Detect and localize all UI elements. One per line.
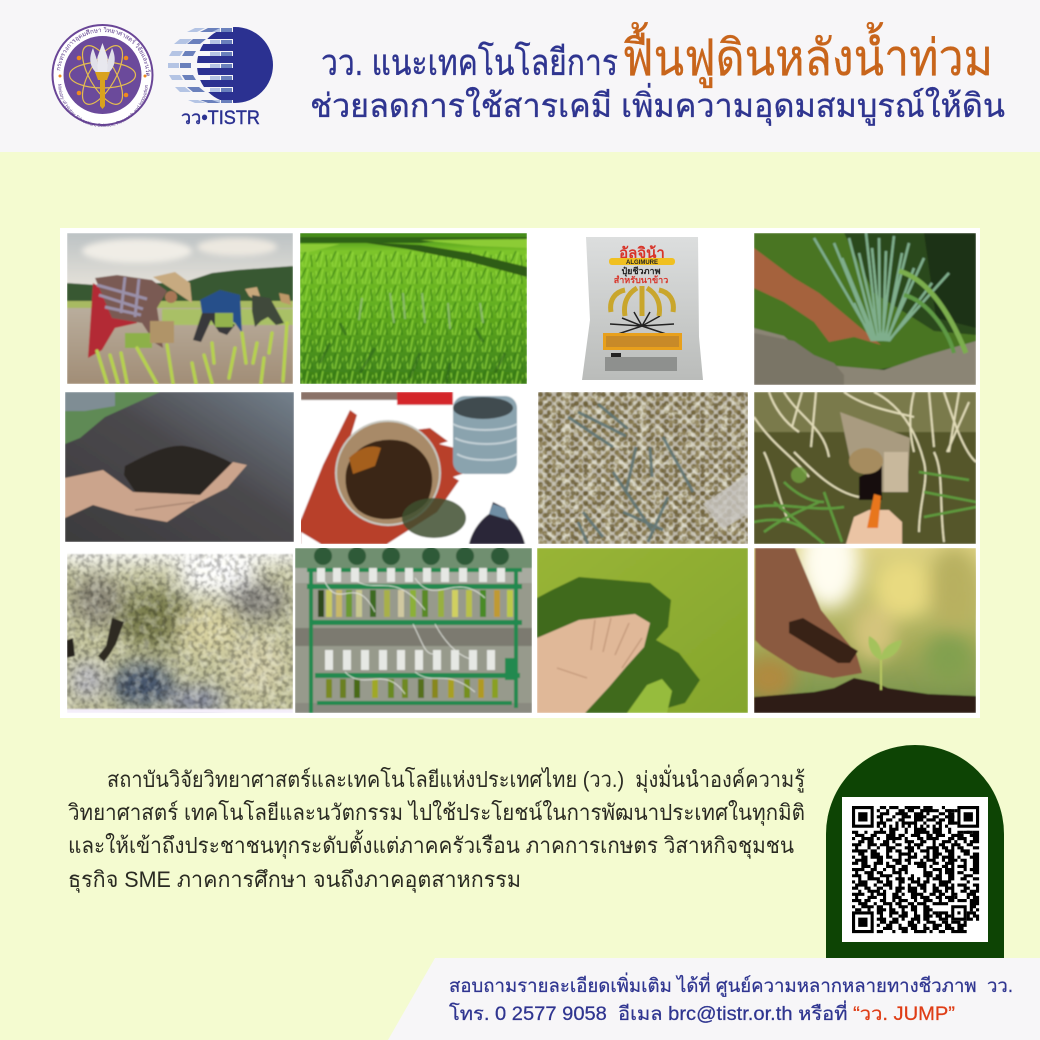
logo: TISTR: [168, 27, 273, 129]
title line 1: [321, 22, 993, 88]
photo: petri dish with soil held in hand: [301, 392, 526, 544]
body paragraph: ธุรกิจ SME ภาคการศึกษา จนถึงภาคอุตสาหกรรม: [68, 867, 521, 893]
QR code card: [826, 745, 1004, 958]
body paragraph: วิทยาศาสตร์ เทคโนโลยีและนวัตกรรม ไปใช้ประโยชน์ในการพัฒนาประเทศในทุกมิติ: [67, 800, 805, 826]
body paragraph: และให้เข้าถึงประชาชนทุกระดับตั้งแต่ภาคครัวเรือน ภาคการเกษตร วิสาหกิจชุมชน: [68, 830, 794, 859]
photo: Algimure fertilizer bag: สำหรับนาข้าว: [614, 275, 668, 285]
logo: ministry seal: [52, 24, 154, 127]
photo: hand holding compost soil: [65, 392, 294, 542]
title line 1: ฟื้นฟูดินหลังน้ำท่วม: [622, 22, 993, 88]
body paragraph: [67, 764, 805, 893]
photo: Algimure fertilizer bag: ALGIMURE: [626, 260, 658, 266]
photo: mottled soil close-up: [67, 553, 293, 713]
photo: hand in green algae water: [537, 548, 748, 713]
photo: Algimure fertilizer bag: ปุ๋ยชีวภาพ: [621, 266, 661, 277]
photo: green rice field: [300, 233, 527, 384]
photo: Algimure fertilizer bag: [533, 228, 752, 388]
body paragraph: สถาบันวิจัยวิทยาศาสตร์และเทคโนโลยีแห่งประเทศไทย (วว.) มุ่งมั่นนำองค์ความรู้: [107, 764, 805, 793]
title line 1: วว. แนะเทคโนโลยีการ: [321, 41, 618, 83]
title line 2: ช่วยลดการใช้สารเคมี เพิ่มความอุดมสมบูรณ์ให้ดิน: [310, 83, 1005, 126]
photo collage panel: [57, 228, 980, 718]
photo: Algimure fertilizer bag: อัลจิน้า: [619, 244, 665, 262]
photo: hand pointing at azolla and rice plant: [754, 233, 976, 385]
photo: hand with soil and seedling: [754, 548, 976, 713]
logo: TISTR: วว•TISTR: [181, 108, 260, 129]
contact line 1: สอบถามรายละเอียดเพิ่มเติม ได้ที่ ศูนย์ความหลากหลายทางชีวภาพ วว.: [449, 972, 1013, 997]
logo: ministry seal: Ministry of Higher Education, Science, Research and Innovation: [58, 84, 148, 127]
photo: microscope view of cyanobacteria: [538, 392, 748, 544]
photo: bioreactor tubes on green rack: [295, 548, 532, 713]
contact line 2: โทร. 0 2577 9058 อีเมล brc@tistr.or.th หรือที่ “วว. JUMP”: [449, 1000, 955, 1025]
photo: soil sample in rice paddy: [754, 392, 976, 544]
QR code: [852, 806, 979, 933]
footer contact panel: [388, 958, 1040, 1040]
photo: farmers planting rice: [67, 233, 293, 384]
header band: [0, 0, 1040, 152]
